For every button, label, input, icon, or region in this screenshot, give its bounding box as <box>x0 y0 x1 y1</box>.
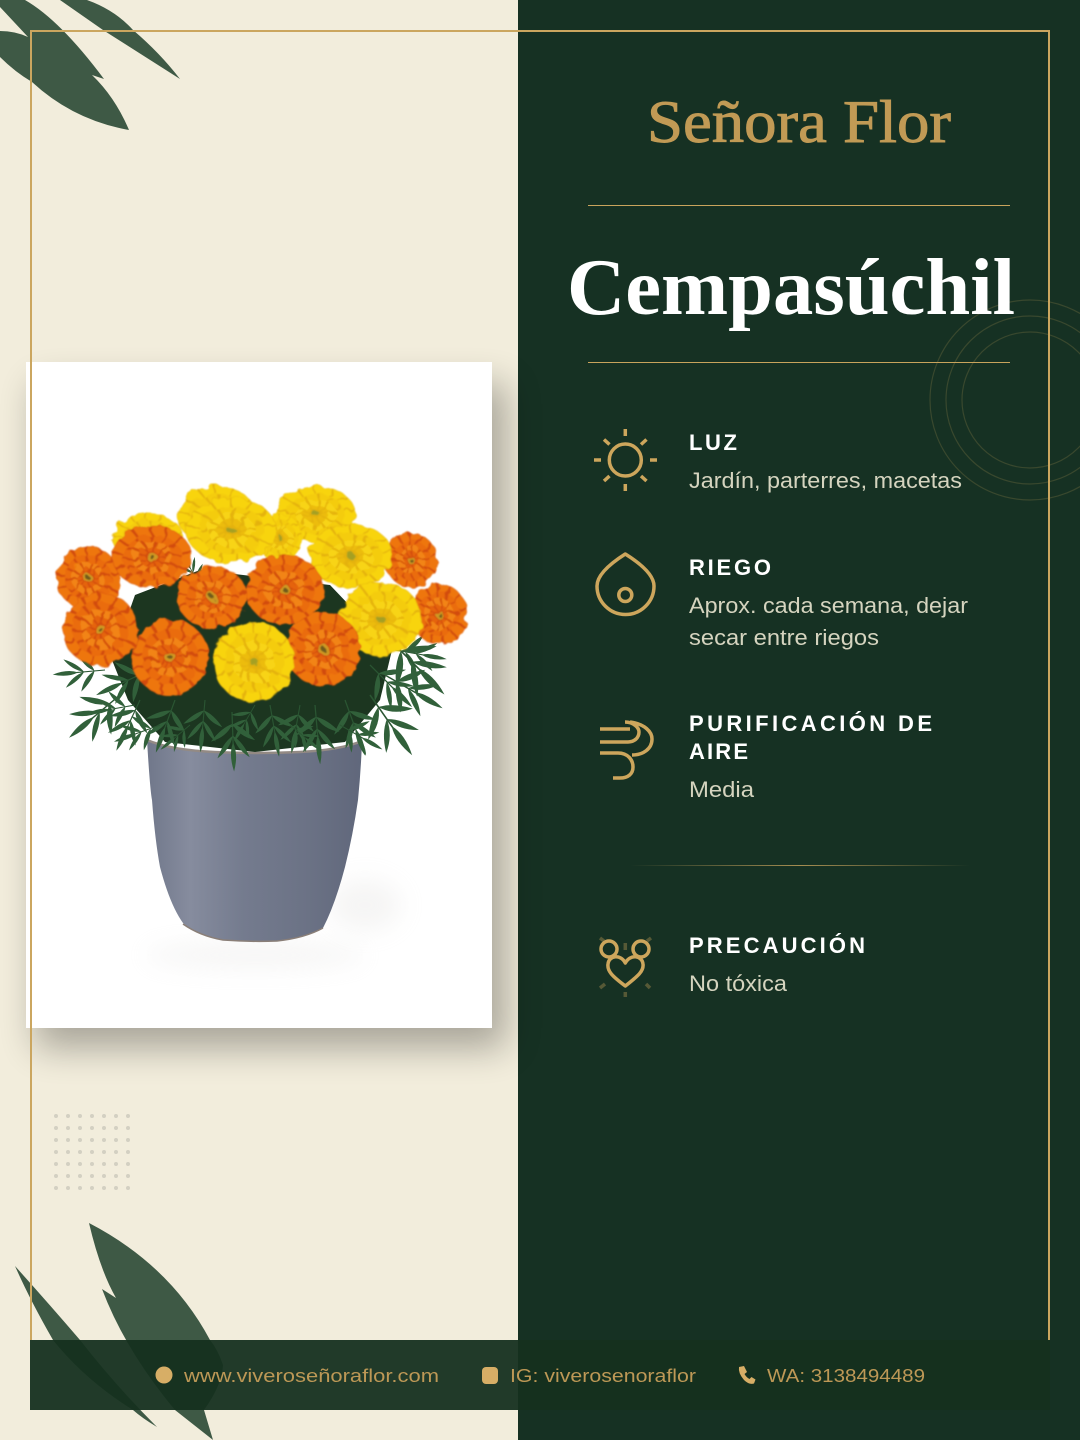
background: cream left panel <box>0 0 518 1440</box>
photo card with plant <box>26 362 506 1048</box>
text: purificacion de aire <box>689 711 932 802</box>
text: purificacion de aire: PURIFICACIÓN DE <box>689 711 932 736</box>
text: purificacion de aire: AIRE <box>689 739 748 764</box>
text: riego: secar entre riegos <box>689 625 879 650</box>
text: riego <box>689 555 968 650</box>
leaves: top-left corner <box>0 0 180 130</box>
footer: instagram: IG: viverosenoraflor <box>510 1366 696 1386</box>
footer: website: www.viveroseñoraflor.com <box>183 1366 439 1386</box>
background: dark green right panel <box>518 0 1080 1440</box>
icon: water drop <box>597 554 654 614</box>
text: precaucion: PRECAUCIÓN <box>689 933 865 958</box>
plant name: Cempasúchil <box>567 244 1015 332</box>
pot <box>147 740 362 941</box>
footer bar <box>30 1340 1050 1410</box>
text: purificacion de aire: Media <box>689 777 755 802</box>
dot grid pattern <box>54 1114 130 1190</box>
text: luz <box>689 430 962 493</box>
text: precaucion <box>689 933 865 996</box>
pot cast shadow <box>329 879 401 931</box>
text: precaucion: No tóxica <box>689 971 788 996</box>
icon: sun <box>594 429 657 491</box>
marigold flowers <box>56 486 467 702</box>
floor shadow <box>145 941 365 969</box>
soil and dark foliage mass <box>112 570 392 752</box>
icon: wind <box>600 722 652 778</box>
icon: heart with paws <box>600 938 651 997</box>
decorative concentric circles <box>930 300 1080 500</box>
divider: gradient <box>630 865 970 866</box>
foliage <box>51 548 465 772</box>
card shadow <box>36 384 506 1048</box>
divider <box>588 204 1010 206</box>
text: riego: Aprox. cada semana, dejar <box>689 593 968 618</box>
text: luz: LUZ <box>689 430 737 455</box>
divider <box>588 362 1010 364</box>
leaves: bottom-left corner <box>15 1223 223 1440</box>
footer: whatsapp: WA: 3138494489 <box>767 1366 925 1386</box>
text: riego: RIEGO <box>689 555 771 580</box>
text: luz: Jardín, parterres, macetas <box>689 468 962 493</box>
white card <box>26 362 492 1028</box>
brand title: Señora Flor <box>647 89 951 155</box>
